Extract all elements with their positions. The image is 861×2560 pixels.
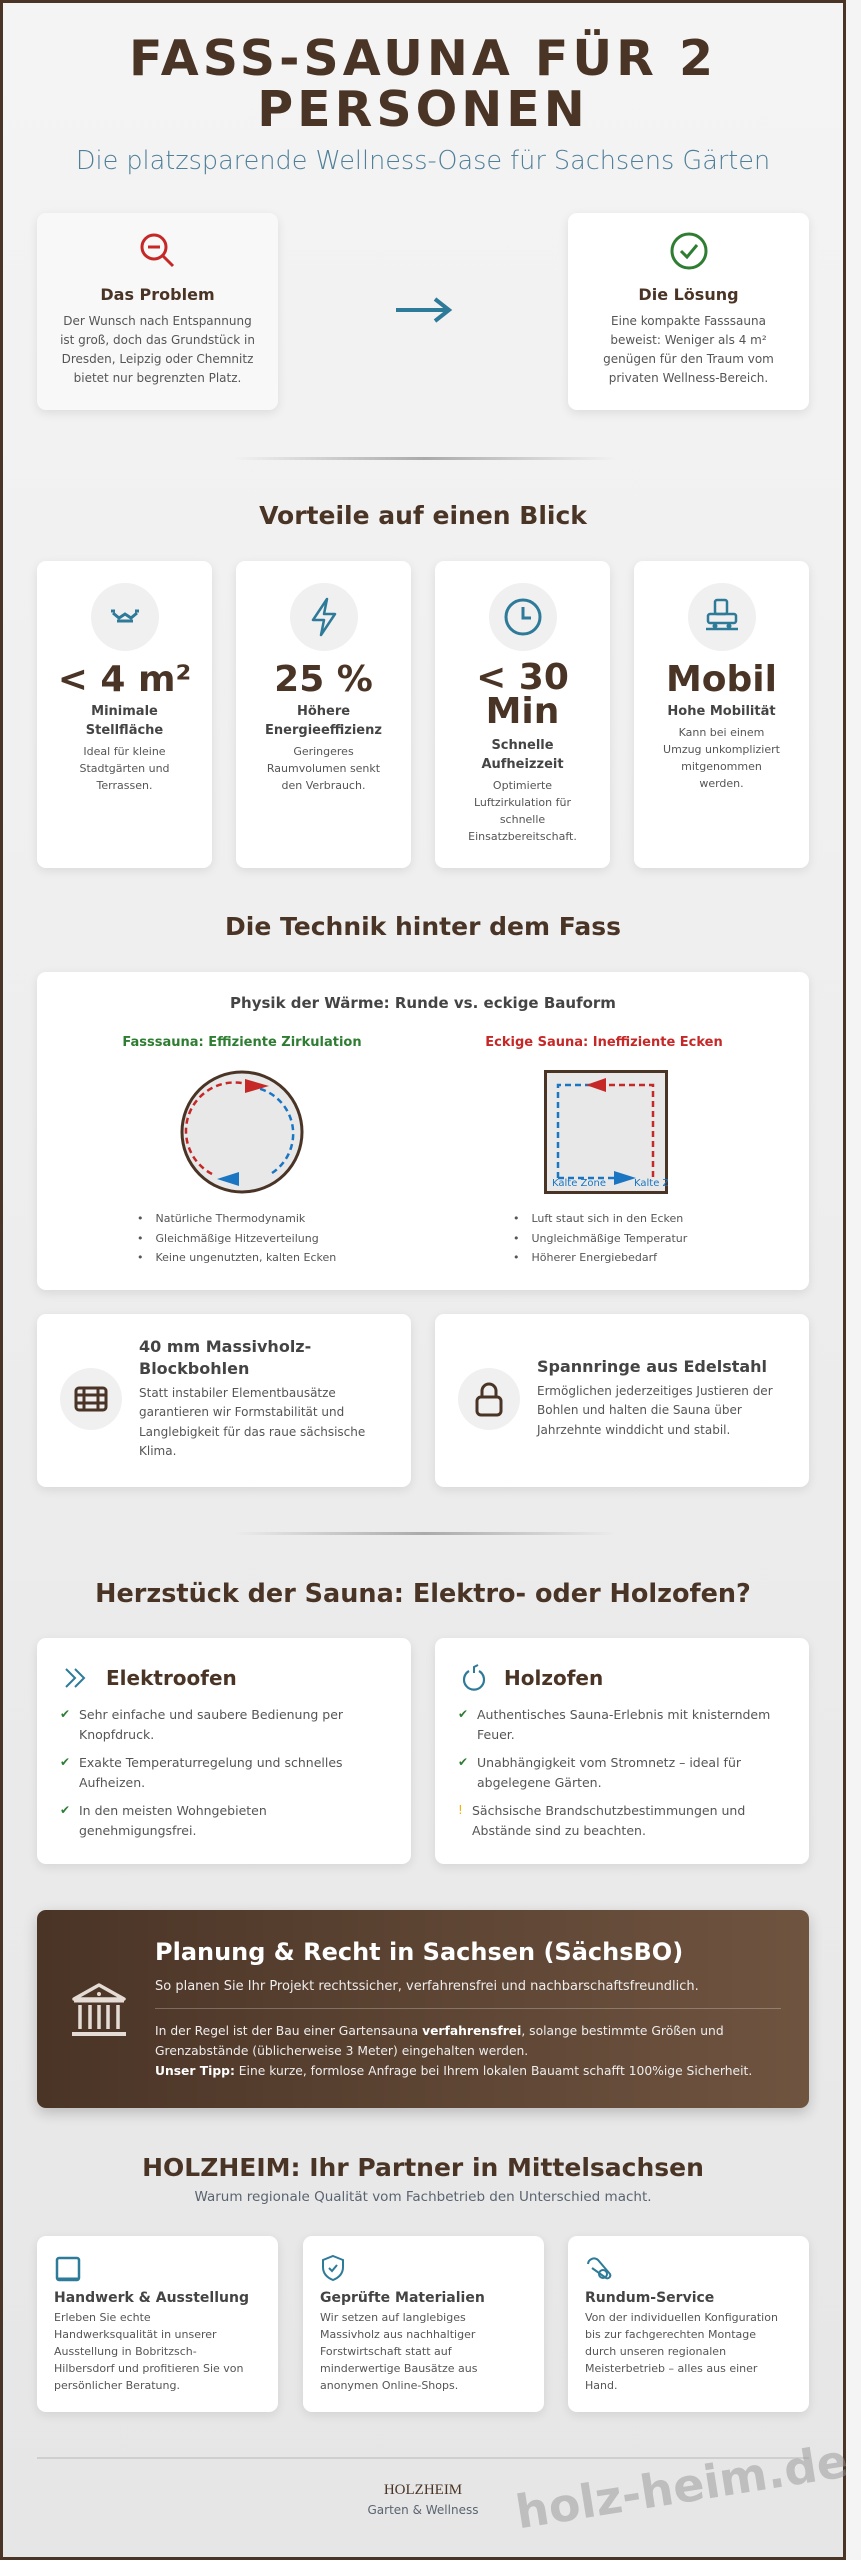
text: Statt instabiler Elementbausätze [139,1386,336,1400]
icon: tool [587,2257,612,2280]
text: anonymen Online-Shops. [320,2379,458,2392]
title: FASS-SAUNA FÜR 2 [129,30,717,87]
panel: stat 2 [236,561,411,868]
title: PERSONEN [257,81,589,138]
list: round: Keine ungenutzten, kalten Ecken [156,1251,336,1264]
text: Klima. [139,1444,176,1458]
list: square: Ungleichmäßige Temperatur [532,1232,687,1244]
text: beweist: Weniger als 4 m² [610,333,767,347]
desc: Stadtgärten und [79,762,170,775]
desc [468,779,577,843]
text [139,1386,365,1458]
list: Sehr einfache und saubere Bedienung per [79,1707,343,1722]
heading: Rundum-Service [585,2290,714,2306]
text [603,314,774,385]
text: Von der individuellen Konfiguration [585,2311,778,2324]
text [320,2311,477,2392]
icon: bolt [290,583,358,651]
subtitle: So planen Sie Ihr Projekt rechtssicher, verfahrensfrei und nachbarschaftsfreundlich. [155,1979,699,1994]
desc: mitgenommen [681,760,762,773]
label: Schnelle [491,738,554,753]
heading [139,1337,311,1378]
panel: Holzofen [435,1638,809,1864]
text [60,314,255,385]
list: round: Gleichmäßige Hitzeverteilung [156,1232,319,1244]
panel: stat 4 [634,561,809,868]
panel: Planung & Recht [37,1910,809,2108]
text: Erleben Sie echte [54,2311,151,2324]
text: In der Regel ist der Bau einer Gartensauna verfahrensfrei, solange bestimmte Größen und Grenzabstände (üblicherweise 3 Meter) eingehalten werden. [155,2024,724,2058]
list: Feuer. [477,1726,515,1742]
footer [368,2482,478,2517]
heading: Planung & Recht in Sachsen (SächsBO) [155,1938,683,1966]
subheading: round: Fasssauna: Effiziente Zirkulation [122,1035,362,1050]
text: minderwertige Bausätze aus [320,2362,477,2375]
subheading: square: Eckige Sauna: Ineffiziente Ecken [485,1035,723,1050]
desc [663,726,780,790]
label: Minimale [91,704,158,719]
list [458,1707,770,1838]
text: privaten Wellness-Bereich. [609,371,768,385]
desc [267,745,380,792]
icon: clock [489,583,557,651]
list: Sächsische Brandschutzbestimmungen und [472,1803,745,1818]
icon: apple/flame [462,1664,486,1691]
desc: Luftzirkulation für [474,796,571,809]
list: Exakte Temperaturregelung und schnelles [79,1755,343,1770]
panel: Handwerk [37,2236,278,2412]
list: ✔ [458,1755,468,1769]
title [129,29,717,138]
panel: solution [568,213,809,410]
icon: zoom minus [140,234,174,267]
text: Wir setzen auf langlebiges [320,2311,466,2324]
desc [79,745,170,792]
text: Hand. [585,2379,617,2392]
desc: den Verbrauch. [282,779,365,792]
desc: Raumvolumen senkt [267,762,380,775]
desc: werden. [699,777,744,790]
label: Energieeffizienz [265,723,382,738]
text [536,1384,773,1437]
list: round: Natürliche Thermodynamik [156,1212,305,1225]
desc: Ideal für kleine [83,745,166,758]
value: Mobil [666,659,777,700]
heading: Physik der Wärme: Runde vs. eckige Bauform [230,994,616,1012]
arrow [396,297,452,323]
list: square [514,1212,688,1264]
desc: schnelle [500,813,545,826]
heading: Handwerk & Ausstellung [54,2290,249,2306]
label: Hohe Mobilität [667,704,776,719]
panel: Blockbohlen [37,1314,411,1487]
heading: Holzofen [504,1666,603,1690]
text: bis zur fachgerechten Montage [585,2328,756,2341]
text: persönlicher Beratung. [54,2379,180,2392]
heading: Die Lösung [638,285,739,304]
heading: Geprüfte Materialien [320,2290,485,2306]
icon: lock [458,1368,520,1430]
text: ist groß, doch das Grundstück in [60,333,255,347]
text: Dresden, Leipzig oder Chemnitz [62,352,253,366]
list: abgelegene Gärten. [477,1774,602,1790]
list: Unabhängigkeit vom Stromnetz – ideal für [477,1755,741,1770]
chart: square corners: Kalte Zone [552,1178,606,1189]
text: genügen für den Traum vom [603,352,774,366]
list: round [138,1212,336,1264]
icon: square [56,2256,80,2282]
panel: problem [37,213,278,410]
text: Forstwirtschaft statt auf [320,2345,452,2358]
icon: planks [60,1368,122,1430]
list: Aufheizen. [79,1774,145,1790]
list: ✔ [60,1707,70,1721]
text: durch unseren regionalen [585,2345,726,2358]
text: Eine kompakte Fasssauna [611,314,766,328]
watermark: holz-heim.de [512,2434,852,2539]
label [265,704,382,738]
text: Ermöglichen jederzeitiges Justieren der [537,1384,773,1398]
heading: Herzstück: Herzstück der Sauna: Elektro- oder Holzofen? [95,1579,751,1609]
subtitle: Die platzsparende Wellness-Oase für Sachsens Gärten [76,146,770,176]
heading: Vorteile: Vorteile auf einen Blick [259,501,587,530]
text: bietet nur begrenzten Platz. [74,371,241,385]
list: ✔ [60,1755,70,1769]
icon: bank [72,1983,126,2036]
icon: trailer [688,583,756,651]
text: Hilbersdorf und profitieren Sie von [54,2362,244,2375]
desc: Kann bei einem [679,726,764,739]
value: < 4 m² [58,659,191,700]
list: ✔ [458,1707,468,1721]
text [155,2024,752,2078]
chart: round circulation [180,1070,304,1194]
panel: stat 1 [37,561,212,868]
text [585,2311,778,2392]
desc: Geringeres [293,745,354,758]
heading: HOLZHEIM: HOLZHEIM: Ihr Partner in Mittelsachsen [142,2153,704,2182]
chart: square corners [544,1070,668,1194]
value [476,657,569,732]
text: garantieren wir Formstabilität und [139,1405,344,1419]
icon: shield [322,2254,344,2282]
heading: Spannringe aus Edelstahl [537,1357,767,1376]
list [60,1707,343,1838]
list: Authentisches Sauna-Erlebnis mit knisterndem [477,1707,770,1722]
heading: Das Problem [100,285,215,304]
text [54,2311,244,2392]
text: Ausstellung in Bobritzsch- [54,2345,197,2358]
heading: Technik: Die Technik hinter dem Fass [225,912,621,941]
label: Höhere [297,704,350,719]
text: Unser Tipp: Eine kurze, formlose Anfrage bei Ihrem lokalen Bauamt schafft 100%ige Sicherheit. [155,2064,752,2078]
text: Jahrzehnte winddicht und stabil. [537,1423,730,1437]
panel: Elektroofen [37,1638,411,1864]
desc: Terrassen. [97,779,152,792]
label [86,704,163,738]
list: genehmigungsfrei. [79,1822,196,1838]
desc: Umzug unkompliziert [663,743,780,756]
text: Massivholz aus nachhaltiger [320,2328,475,2341]
footer: HOLZHEIM [384,2482,462,2498]
panel: stat 3 [435,561,610,868]
list: ! [458,1803,463,1817]
heading: Blockbohlen [139,1359,249,1378]
list: In den meisten Wohngebieten [79,1803,267,1818]
panel: Spannringe [435,1314,809,1487]
label [481,738,564,772]
heading: Elektroofen [106,1666,237,1690]
list: Abstände sind zu beachten. [472,1822,646,1838]
list: square: Höherer Energiebedarf [532,1251,657,1264]
list: square: Luft staut sich in den Ecken [532,1212,683,1225]
icon: resize [91,583,159,651]
text: Langlebigkeit für das raue sächsische [139,1425,365,1439]
label: Aufheizzeit [481,757,564,772]
panel: physics [37,972,809,1290]
value: < 30 [476,657,569,698]
desc: Optimierte [493,779,552,792]
heading: 40 mm Massivholz- [139,1337,311,1356]
subheading: Warum regionale Qualität vom Fachbetrieb den Unterschied macht. [194,2189,652,2205]
text: Handwerksqualität in unserer [54,2328,217,2341]
panel: Materialien [303,2236,544,2412]
icon: chevrons [65,1668,86,1688]
desc: Einsatzbereitschaft. [468,830,577,843]
text: Der Wunsch nach Entspannung [63,314,252,328]
icon: check [670,232,708,270]
list: Knopfdruck. [79,1726,154,1742]
text: Bohlen und halten die Sauna über [537,1403,742,1417]
label: Stellfläche [86,723,163,738]
footer: Garten & Wellness [368,2503,478,2517]
value: Min [486,691,559,732]
value: 25 % [274,659,373,700]
list: ✔ [60,1803,70,1817]
panel: Service [568,2236,809,2412]
text: Meisterbetrieb – alles aus einer [585,2362,757,2375]
